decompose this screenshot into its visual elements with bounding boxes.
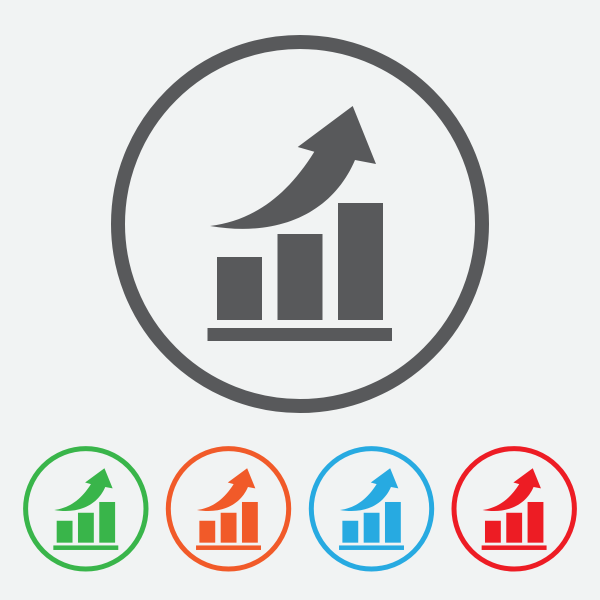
ring: dark: [118, 42, 482, 406]
small icon: orange: [168, 449, 289, 569]
arrow: rising curve: [210, 106, 376, 229]
bar chart: three rising bars: [217, 203, 383, 320]
main icon: dark growth chart in ring: [118, 42, 482, 406]
small icon: green: [26, 449, 146, 569]
small icon: red: [454, 449, 574, 569]
small icon: blue: [311, 449, 432, 569]
chart baseline: [208, 328, 392, 341]
